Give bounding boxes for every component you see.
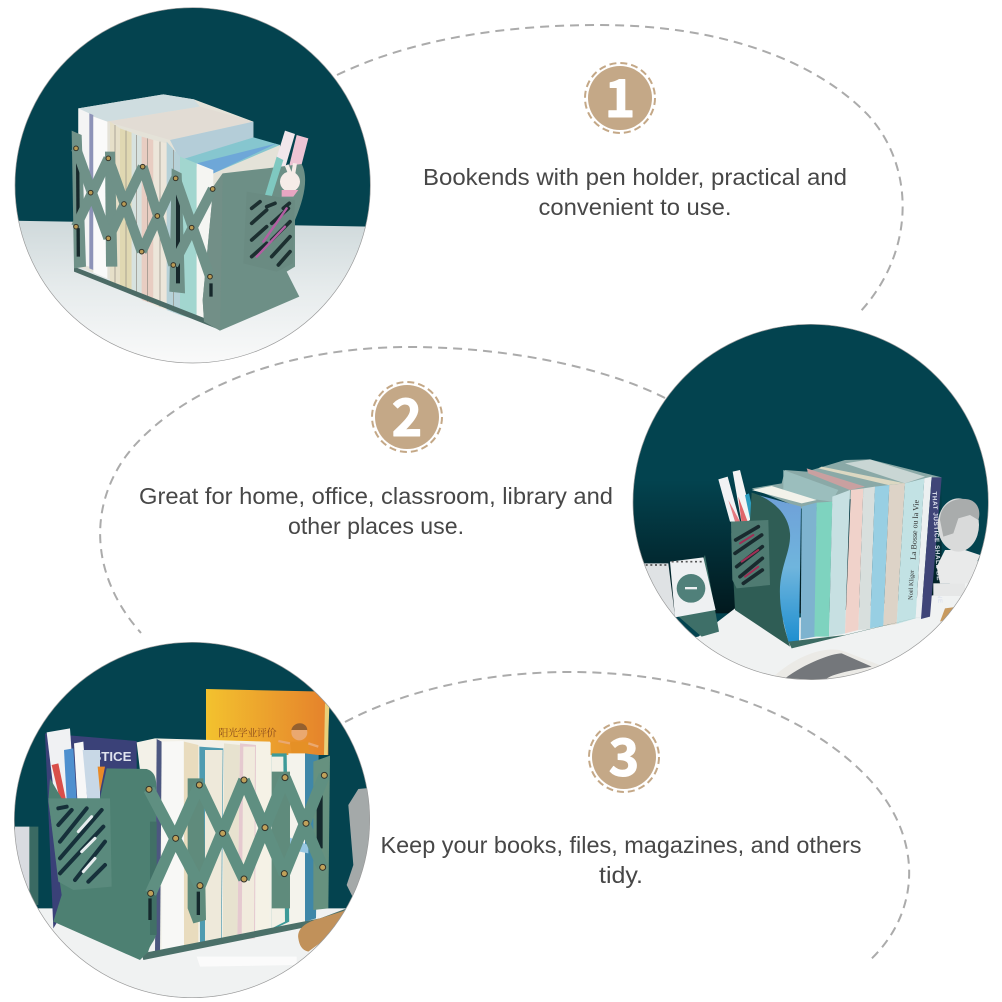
number badge 1: 1 (605, 57, 635, 132)
spine titles: Noël Kliger (907, 569, 916, 600)
photo circle: extended bookend front view: STICE (92, 749, 132, 764)
book block (137, 738, 318, 955)
photo circle: bookend holding books on a desk (632, 323, 992, 683)
base plate (74, 267, 220, 330)
photo circle: extended bookend front view (10, 638, 377, 1002)
photo circle: bookend with scissor arm and pen holder (10, 3, 377, 370)
bookend panel (203, 164, 305, 331)
slider plates (72, 131, 86, 268)
caption 3: tidy. (599, 862, 643, 888)
plaster bust (346, 788, 370, 896)
orange book (206, 689, 328, 755)
dashed connector: bottom section (345, 672, 909, 962)
caption 1: Bookends with pen holder, practical and (423, 164, 847, 190)
book spines (752, 493, 801, 642)
caption 1: convenient to use. (538, 194, 732, 220)
caption 2 (139, 483, 613, 539)
slider plates (313, 756, 330, 910)
dashed connector: middle section (100, 347, 665, 633)
base plate (142, 908, 347, 960)
number badge 2: 2 (392, 376, 422, 451)
rivets (74, 146, 215, 279)
cork stopper (940, 607, 954, 622)
number badge 3: 3 (609, 716, 639, 791)
scissor links (76, 148, 213, 277)
spine titles (908, 500, 919, 600)
pens (277, 130, 295, 167)
dashed connector: top section (337, 25, 903, 312)
caption 3: Keep your books, files, magazines, and others (380, 832, 862, 858)
number badge 2 (372, 376, 442, 452)
pens (718, 477, 740, 522)
caption 2: other places use. (288, 513, 464, 539)
pen on desk (197, 957, 297, 967)
plaster bust (933, 498, 980, 596)
small calendar left (15, 827, 38, 905)
pen holder (48, 798, 112, 890)
pens (46, 728, 72, 798)
photo circle: extended bookend front view: 阳光学业评价 (218, 727, 277, 740)
photo circle: bookend holding books on a desk: THAT JUSTICE SHALL BE DONE (930, 491, 943, 603)
spine titles: La Bosse ou la Vie (909, 499, 921, 560)
navy book (45, 733, 137, 928)
pen holder (265, 194, 272, 196)
number badge 1 (585, 57, 655, 133)
number badge 3 (589, 716, 659, 792)
caption 3 (380, 832, 862, 888)
open book on desk (775, 650, 880, 678)
scissor links (149, 775, 324, 893)
bookend panel (731, 493, 790, 647)
bookend panel (48, 768, 156, 960)
cartoon boy (278, 723, 319, 748)
rivets (146, 772, 327, 896)
pen holder (731, 520, 770, 588)
caption 2: Great for home, office, classroom, library and (139, 483, 613, 509)
book tops (752, 459, 942, 510)
base plate (788, 616, 921, 648)
desk calendars (644, 563, 675, 616)
caption 1 (423, 164, 847, 220)
cork stopper (298, 910, 347, 952)
book block (78, 94, 280, 323)
